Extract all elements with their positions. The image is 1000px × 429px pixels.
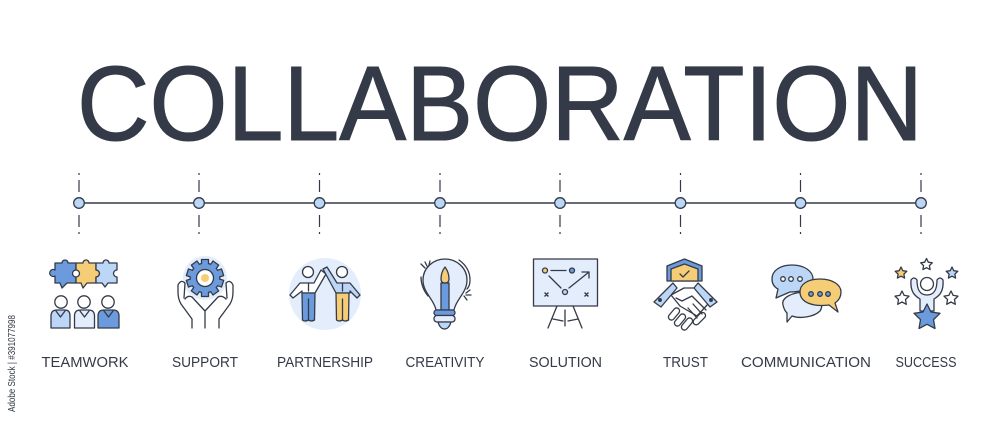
labels: TRUST — [663, 355, 708, 371]
icon: support — [178, 256, 233, 328]
icon: teamwork — [50, 260, 119, 328]
icon: success — [895, 258, 958, 328]
labels: SUPPORT — [172, 355, 238, 371]
icon: creativity — [421, 259, 471, 329]
timeline — [74, 173, 926, 234]
labels: CREATIVITY — [406, 355, 485, 371]
icon: partnership — [289, 258, 361, 330]
watermark credit: Adobe Stock | #391077998 — [7, 315, 18, 412]
labels — [42, 355, 956, 371]
labels: COMMUNICATION — [741, 355, 871, 371]
labels: SUCCESS — [896, 355, 956, 371]
icon: solution — [534, 259, 598, 328]
labels: TEAMWORK — [42, 355, 129, 371]
icon: communication — [772, 265, 841, 322]
labels: PARTNERSHIP — [277, 355, 373, 371]
icon: trust — [654, 259, 717, 331]
labels: SOLUTION — [529, 355, 602, 371]
title: COLLABORATION — [77, 45, 923, 163]
